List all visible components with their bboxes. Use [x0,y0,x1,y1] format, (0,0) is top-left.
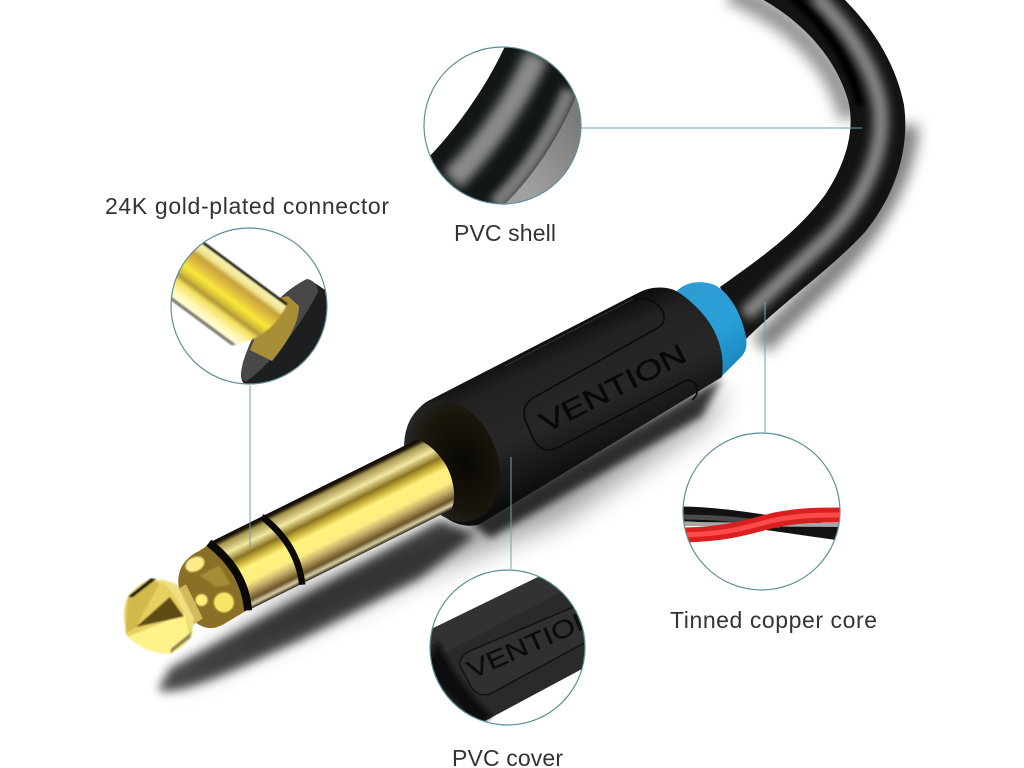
callout photo [430,577,584,722]
callout: PVC cover [429,457,586,766]
leader line [510,457,512,569]
callout photo [684,506,840,542]
label: Tinned copper core [670,607,877,633]
callout photo [430,48,580,204]
gold plug [106,433,467,668]
cable [720,0,905,340]
shaft sleeve [210,433,465,612]
logo text: VENTION [535,338,691,438]
connector body [387,288,723,536]
tip [109,569,203,668]
logo plate [524,299,697,450]
label: 24K gold-plated connector [105,193,389,219]
neck [153,540,252,642]
body front face [387,386,517,536]
label: PVC shell [454,220,556,246]
callout ring [424,47,581,204]
callout: tinned copper core [670,302,877,633]
ring groove 2 [262,511,307,587]
drop shadow under plug [158,378,725,691]
leader line [249,385,251,548]
leader line [581,127,862,129]
callout: PVC shell [424,40,862,246]
callout photo: VENTION [463,603,601,684]
blue ring [676,282,746,376]
callout: gold-plated connector [105,193,389,548]
upper ridge line [505,299,633,366]
callout ring [171,228,327,384]
callout ring [683,433,840,590]
ring groove 1 [209,538,254,613]
callout ring [430,570,585,725]
leader line [764,302,766,433]
callout photo [172,242,326,384]
cable shadow [730,0,908,345]
